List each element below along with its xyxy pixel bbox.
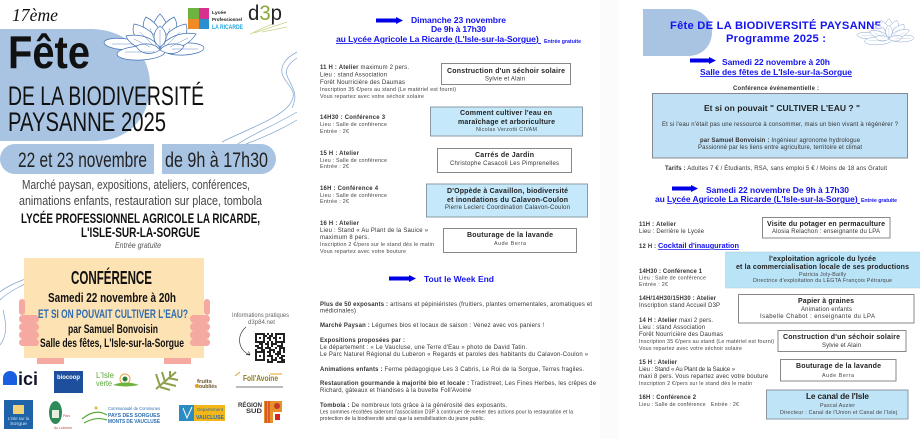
box: bouturage: Aude Berra	[494, 241, 526, 247]
box: exploitation agricole	[726, 252, 920, 288]
icon: small water lily	[857, 19, 914, 46]
practical info and QR code: d3p84.net	[248, 319, 275, 326]
item: cocktail: 12 H :	[639, 244, 658, 250]
title: programme: Programme 2025 :	[726, 33, 826, 45]
item: conference 2: 16H : Conférence 2	[639, 395, 697, 401]
box: canal de l'Isle: Directeur : Canal de l'Union et Canal de l'Islej	[780, 410, 897, 416]
date pill	[0, 144, 154, 174]
venue: LYCÉE PROFESSIONNEL AGRICOLE LA RICARDE,	[21, 211, 260, 226]
logo: ici	[3, 369, 38, 389]
arrow: week end	[389, 275, 416, 282]
week end details: médicinales)	[320, 308, 356, 314]
river lines	[0, 52, 297, 345]
label: conference: Conférence événementielle :	[733, 86, 819, 92]
panel: Sunday programme	[320, 15, 597, 422]
logo: Parc du Luberon: du Luberon	[54, 426, 72, 430]
heading: Saturday day	[655, 185, 897, 204]
box: exploitation agricole: Directrice d'exploitation du LEGTA François Pétrarque	[753, 278, 892, 284]
icon: water lily	[104, 14, 204, 61]
logo: lycée La Ricarde: LA RICARDE	[212, 24, 244, 31]
item: 16 H workshop: 16 H : Atelier	[320, 221, 360, 227]
box: cultiver l'eau: Nicolas Verzotti CIVAM	[476, 127, 538, 133]
item: 16 H workshop	[320, 221, 434, 255]
box: potager	[762, 218, 890, 238]
box: papier à graines: Animation enfants	[801, 307, 852, 313]
week end details: Animations enfants : Ferme pédagogique Les 3 Cabris, Le Roi de la Sorgue, Terres fragiles.	[320, 367, 584, 373]
item: 11 H workshop: Inscription 35 €/pers au stand (Le matériel est fourni)	[320, 87, 456, 93]
box: cultiver l'eau: Comment cultiver l'eau en	[460, 110, 552, 117]
box: main conference: Et si l'eau n'était pas une ressource à consommer, mais un bien vivant à régénérer ?	[662, 122, 899, 128]
heading: Saturday evening: Salle des fêtes de L'Isle-sur-la-Sorgue	[700, 67, 852, 77]
box: potager: Visite du potager en permaculture	[767, 221, 885, 228]
item: 15 H workshop: Lieu : Salle de conférence	[320, 158, 387, 164]
box: papier à graines: Papier à graines	[798, 298, 854, 305]
item: 15 H workshop: Inscription 2 €/pers sur le stand dès le matin	[639, 381, 752, 387]
box: bouturage: Aude Berra	[822, 373, 854, 379]
logo: Pays des Sorgues: Communauté de Communes	[108, 406, 161, 411]
box: bouturage	[780, 360, 896, 381]
item: 11H workshop: Lieu : Derrière le Lycée	[639, 229, 705, 235]
week end details: Marché Paysan : Légumes bios et locaux de saison : Venez avec vos paniers !	[320, 323, 544, 329]
item: 15 H workshop	[320, 151, 387, 170]
logo: Foll'Avoine: Foll'Avoine	[243, 374, 278, 383]
heading: Saturday evening: Samedi 22 novembre à 20h	[722, 57, 830, 67]
title: Fête	[8, 26, 90, 78]
item: 15 H workshop	[639, 360, 769, 387]
item: 11 H workshop	[320, 65, 456, 100]
item: 16H conference 4	[320, 186, 387, 205]
partner logos row 1	[3, 369, 283, 393]
title: DE LA BIODIVERSITÉ	[8, 81, 204, 111]
week end details: Expositions proposées par :	[320, 338, 405, 344]
date pill: 22 et 23 novembre	[18, 149, 147, 172]
hours pill	[162, 144, 276, 174]
box: carrés de jardin: Carrés de Jardin	[475, 152, 534, 159]
logo: fruits oubliés: oubliés	[199, 384, 217, 390]
box: Oppède à Cavaillon	[426, 184, 588, 217]
logo: Vaucluse: VAUCLUSE	[196, 415, 225, 421]
box: main conference	[652, 94, 908, 158]
week end details: Restauration gourmande à majorité bio et locale : Tradistreet, Les Fines Herbes, les crêpes de	[320, 381, 597, 387]
heading: Sunday	[336, 15, 581, 45]
week end details	[320, 302, 597, 422]
practical info and QR code: Informations pratiques	[232, 312, 290, 319]
week end details: Le Parc Naturel Régional du Luberon « Regards et paroles des habitants du Calavon-Coulon »	[320, 352, 589, 358]
item: conference 1	[639, 269, 706, 288]
logo: lycée La Ricarde: Lycée	[212, 10, 226, 15]
logo: Vaucluse	[179, 405, 225, 421]
item: 14 H workshop: Inscription 35 €/pers au stand (Le matériel est fourni)	[639, 339, 774, 345]
logo: Pays des Sorgues: MONTS DE VAUCLUSE	[108, 419, 160, 425]
box: séchoir solaire: Sylvie et Alain	[485, 76, 525, 82]
box: carrés de jardin: Christophe Casacoli Les Pimprenelles	[450, 161, 559, 167]
logo: fruits oubliés: fruits	[197, 379, 212, 385]
logo: L'Isle sur la Sorgue: L'Isle sur la	[8, 416, 29, 421]
logo: biocoop	[54, 371, 83, 393]
box: canal de l'Isle: Pascal Auzier	[820, 403, 855, 409]
logo: Pays des Sorgues: PAYS DES SORGUES	[108, 413, 160, 419]
logo: biocoop: biocoop	[57, 375, 80, 381]
box: cultiver l'eau	[430, 107, 582, 136]
logo: fruits oubliés	[195, 379, 217, 390]
logo: L'Isle verte	[96, 371, 139, 388]
item: 14H30 conference 3: Lieu : Salle de conférence	[320, 122, 387, 128]
item: 14 H workshop: Vous repartez avec votre séchoir solaire	[639, 346, 742, 352]
box: exploitation agricole: Patricia Joly-Bailly	[799, 272, 846, 278]
box: bouturage	[444, 228, 576, 252]
venue: L'ISLE-SUR-LA-SORGUE	[81, 225, 200, 240]
box: séchoir solaire: Sylvie et Alain	[822, 343, 861, 349]
item: conference 1: Entrée : 2€	[639, 282, 668, 288]
logo: Région Sud: RÉGION	[238, 401, 262, 409]
heading: Sunday: au Lycée Agricole La Ricarde (L'Isle-sur-la-Sorgue)	[336, 34, 541, 44]
week end details: Les sommes récoltées aideront l'association D3P à continuer de mener des actions pour la restauration et la	[320, 410, 573, 416]
box: canal de l'Isle: Le canal de l'Isle	[806, 391, 869, 401]
box: carrés de jardin	[438, 148, 572, 172]
item: conference 2	[639, 395, 739, 408]
box: bouturage: Bouturage de la lavande	[467, 232, 553, 239]
week end details: protection de la biodiversité ainsi que la sensibilisation du jeune public.	[320, 416, 485, 422]
description	[19, 177, 263, 208]
heading: Saturday day: Entrée gratuite	[861, 198, 897, 204]
box: séchoir solaire	[442, 64, 570, 84]
arrow: Saturday evening	[690, 57, 716, 64]
item: 16H conference 4: Lieu : Salle de conférence	[320, 193, 387, 199]
blue header shape	[643, 9, 712, 56]
logo: Région Sud	[238, 401, 282, 423]
conference sign: CONFÉRENCE	[71, 267, 152, 288]
blue title shape	[0, 29, 150, 141]
heading: Saturday day: Lycée Agricole La Ricarde (L'Isle-sur-la-Sorgue)	[667, 194, 860, 204]
title: PAYSANNE 2025	[8, 107, 166, 137]
rates: Tarifs : Adultes 7 € / Étudiants, RSA, sans emploi 5 € / Moins de 18 ans Gratuit	[665, 165, 887, 172]
panel: Saturday programme	[639, 9, 920, 419]
item: 16 H workshop: maximum 8 pers.	[320, 235, 369, 241]
week end details: Plus de 50 exposants : artisans et pépiniéristes (fruitiers, plantes ornementales, aromatiques et	[320, 302, 592, 308]
conference sign: Samedi 22 novembre à 20h	[48, 291, 176, 305]
heading: Saturday day: Samedi 22 novembre De 9h à 17h30	[706, 185, 849, 195]
item: conference 1: Lieu : Salle de conférence	[639, 276, 706, 282]
box: séchoir solaire: Construction d'un séchoir solaire	[447, 68, 565, 75]
partner logos row 2	[4, 400, 282, 430]
edition label: 17ème	[12, 5, 58, 25]
hours pill: de 9h à 17h30	[165, 149, 268, 172]
item: 14 H workshop: Forêt Nourricière des Daumas	[639, 332, 723, 338]
item: conference 2: Lieu : Salle de conférence Entrée : 2€	[639, 402, 739, 408]
item: 14 H workshop: 14 H : Atelier maxi 2 pers.	[639, 318, 713, 324]
item: 16 H workshop: Inscription 2 €/pers sur le stand dès le matin	[320, 242, 434, 248]
logo: L'Isle sur la Sorgue: Sorgue	[10, 421, 27, 426]
practical info and QR code	[232, 312, 290, 362]
item: seed paper workshop: 14H/14H30/15H30 : Atelier	[639, 296, 717, 302]
arrow: Sunday	[376, 17, 403, 24]
item: 15 H workshop: 15 H : Atelier	[320, 151, 360, 157]
heading: week end: Tout le Week End	[424, 274, 494, 284]
heading: Saturday day: au	[655, 194, 667, 204]
logo: ici: ici	[18, 369, 38, 389]
item: 11 H workshop: Vous repartez avec votre séchoir solaire	[320, 94, 424, 100]
box: Oppède à Cavaillon: et inondations du Calavon-Coulon	[447, 197, 568, 204]
heading: Saturday evening	[700, 57, 852, 77]
item: 16 H workshop: Vous repartez avec votre bouture	[320, 249, 406, 255]
logo: Parc du Luberon: Parc	[63, 414, 71, 418]
item: 14H30 conference 3	[320, 115, 387, 135]
item: 11 H workshop: 11 H : Atelier maximum 2 pers.	[320, 65, 409, 71]
item: 11 H workshop: Forêt Nourricière des Daumas	[320, 80, 405, 86]
item: 16H conference 4: Entrée : 2€	[320, 199, 349, 205]
link: cocktail: Cocktail d'inauguration	[658, 241, 739, 250]
logo: d3p: d3p	[248, 2, 282, 25]
item: seed paper workshop: Inscription stand Accueil D3P	[639, 303, 720, 309]
margin strip between pages	[600, 0, 619, 439]
box: exploitation agricole: l'exploitation agricole du lycée	[769, 256, 876, 263]
box: papier à graines	[738, 294, 914, 323]
item: conference 1: 14H30 : Conférence 1	[639, 269, 703, 275]
logo: L'Isle sur la Sorgue	[4, 400, 33, 429]
item: 11 H workshop: Lieu : stand Association	[320, 72, 387, 78]
box: cultiver l'eau: maraîchage et arboriculture	[458, 119, 555, 126]
title: programme	[670, 19, 883, 45]
box: main conference: Et si on pouvait " CULTIVER L'EAU ? "	[704, 103, 860, 113]
venue: Entrée gratuite	[115, 241, 161, 250]
item: 14H30 conference 3: Entrée : 2€	[320, 129, 349, 135]
box: Oppède à Cavaillon: D'Oppède à Cavaillon, biodiversité	[447, 188, 568, 195]
heading: Sunday: Dimanche 23 novembre	[411, 15, 506, 25]
venue	[21, 211, 260, 250]
item: 14 H workshop: Lieu : stand Association	[639, 325, 705, 331]
logo: Vaucluse: Département	[197, 407, 224, 412]
description: animations enfants, restauration sur place, tombola	[19, 193, 263, 208]
box: Oppède à Cavaillon: Pierre Leclerc Coordination Calavon-Coulon	[445, 205, 570, 211]
heading: Sunday: De 9h à 17h30	[431, 24, 486, 34]
box: séchoir solaire: Construction d'un séchoir solaire	[783, 334, 900, 341]
logo: L'Isle verte: verte	[96, 379, 112, 388]
box: séchoir solaire	[778, 330, 906, 352]
logo: lycée La Ricarde: Professionnel	[212, 17, 242, 22]
box: exploitation agricole: et la commercialisation locale de ses productions	[736, 264, 909, 271]
week end details: Le département : « Le Vaucluse, une Terre d'Eau » photo de David Tatin.	[320, 345, 527, 351]
conference sign: Salle des fêtes, L'Isle-sur-la-Sorgue	[40, 338, 184, 350]
item: seed paper workshop	[639, 296, 720, 309]
title: programme: Fête DE LA BIODIVERSITÉ PAYSANNE	[670, 19, 883, 32]
hands	[19, 299, 210, 346]
item: 14 H workshop	[639, 318, 774, 352]
logo: Foll'Avoine	[235, 372, 283, 388]
logo: d3p	[248, 2, 287, 34]
item: 16 H workshop: Lieu : Stand « Au Plant de la Sauice »	[320, 228, 429, 234]
item: 15 H workshop: maxi 8 pers. Vous repartez avec votre bouture	[639, 374, 769, 380]
box: bouturage: Bouturage de la lavande	[796, 363, 881, 370]
item: 11H workshop	[639, 222, 705, 235]
box: main conference: Passionné par les liens entre agriculture, territoire et climat	[698, 145, 862, 151]
logo: Pays des Sorgues	[82, 406, 161, 425]
box: main conference: par Samuel Bonvoisin : Ingénieur agronome hydrologue	[700, 138, 861, 144]
item: 15 H workshop: Lieu : Stand « Au Plant de la Sauice »	[639, 367, 736, 373]
box: papier à graines: Isabelle Chabot : enseignante du LPA	[760, 314, 875, 320]
description: Marché paysan, expositions, ateliers, conférences,	[22, 177, 250, 192]
logo: lycée La Ricarde	[188, 8, 244, 31]
item: 15 H workshop: Entrée : 2€	[320, 164, 349, 170]
conference sign: ET SI ON POUVAIT CULTIVER L'EAU?	[38, 307, 188, 321]
logo: L'Isle verte: L'Isle	[96, 371, 115, 380]
heading: Sunday: Entrée gratuite	[544, 39, 581, 45]
item: 14H30 conference 3: 14H30 : Conférence 3	[320, 115, 386, 121]
week end details: Richard, gâteaux et friandises à la buvette Foll'Avoine	[320, 388, 472, 394]
box: canal de l'Isle	[766, 390, 908, 419]
title	[8, 26, 204, 137]
item: 11H workshop: 11H : Atelier	[639, 222, 677, 228]
logo: Région Sud: SUD	[246, 409, 263, 415]
item: 15 H workshop: 15 H : Atelier	[639, 360, 678, 366]
logo: plant	[156, 371, 178, 390]
conference sign: par Samuel Bonvoisin	[68, 324, 158, 336]
item: 16H conference 4: 16H : Conférence 4	[320, 186, 379, 192]
panel: poster	[0, 2, 297, 430]
box: potager: Alosia Relachon : enseignante du LPA	[772, 229, 880, 235]
arrow: Saturday day	[672, 185, 698, 192]
logo: Parc du Luberon	[49, 401, 72, 430]
week end details: Tombola : De nombreux lots grâce à la générosité des exposants.	[320, 403, 507, 409]
conference sign	[19, 258, 210, 364]
